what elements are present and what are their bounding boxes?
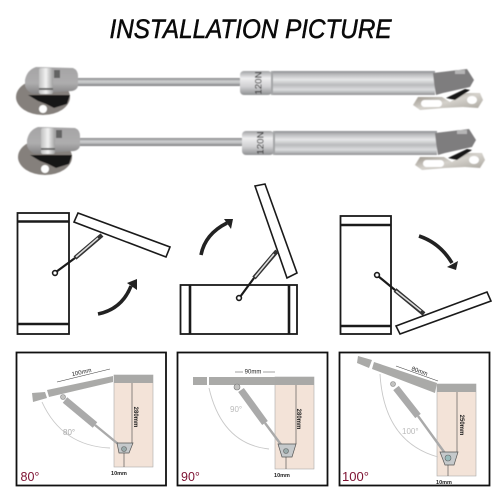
- diagram: cabinet with door opening down: [340, 216, 491, 334]
- dimension: 10mm: 10mm: [274, 473, 290, 479]
- arrow: rising curve: [201, 219, 233, 255]
- heading: 80°: 80°: [20, 470, 39, 484]
- arrow: falling curve: [419, 236, 458, 270]
- label: 120N: 120N: [256, 131, 267, 154]
- heading: 90°: 90°: [181, 470, 200, 484]
- dimension: 250mm: 250mm: [458, 415, 464, 435]
- panel: 100 degrees: [340, 352, 490, 486]
- diagram: cabinet horizontal with door upright: [180, 184, 297, 334]
- dimension: 100mm: 100mm: [71, 368, 92, 378]
- angle label: 80°: [63, 428, 75, 437]
- angle label: 100°: [402, 427, 419, 436]
- gas strut 1: [16, 67, 483, 115]
- angle label: 90°: [230, 405, 242, 414]
- dimension: 280mm: 280mm: [132, 407, 138, 427]
- label: 120N: 120N: [254, 71, 265, 94]
- dimension: 10mm: 10mm: [111, 471, 127, 477]
- dimension: 80mm: 80mm: [410, 366, 428, 378]
- gas strut 2: [18, 127, 485, 175]
- panel: 90 degrees: 90mm: [245, 370, 261, 376]
- panel: 80 degrees: [16, 352, 166, 486]
- dimension: 10mm: 10mm: [436, 480, 452, 486]
- arrow: opening upward right: [98, 279, 137, 314]
- panel: 90 degrees: [178, 352, 328, 486]
- dimension: 90mm: [243, 368, 263, 375]
- title: INSTALLATION PICTURE: [110, 14, 392, 44]
- heading: 100°: 100°: [342, 469, 369, 484]
- dimension: 280mm: 280mm: [295, 409, 301, 429]
- diagram: cabinet with door opening right: [17, 213, 170, 334]
